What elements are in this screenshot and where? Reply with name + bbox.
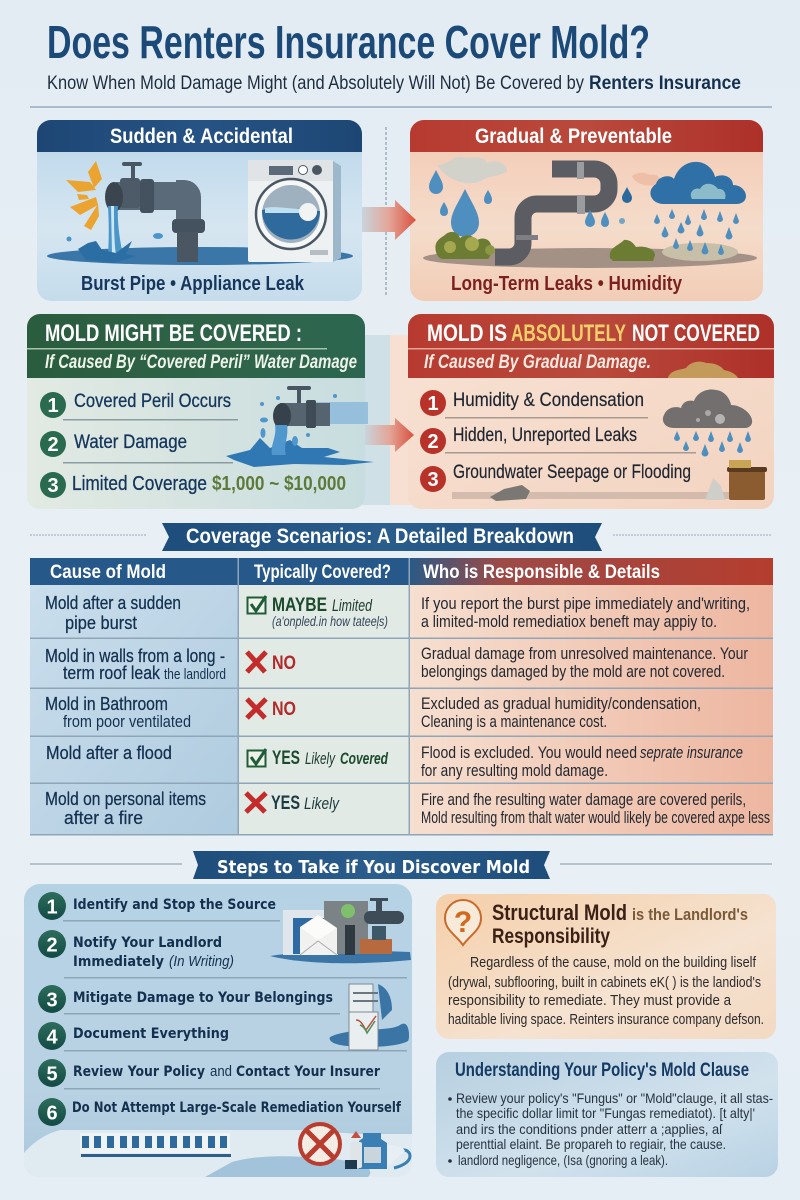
step 6: do not attempt remediation: 6 (46, 1102, 58, 1124)
clause bullet list: landlord negligence, (Isa (gnoring a leak). (458, 1152, 668, 1168)
callout heading: Structural Mold (492, 900, 627, 925)
step 2: notify your landlord: Notify Your Landlord (73, 935, 222, 951)
illustration: mail, meter and valve (270, 898, 411, 963)
step 1: covered peril occurs: Covered Peril Occurs (74, 391, 231, 412)
row: sudden pipe burst: pipe burst (65, 613, 137, 633)
heading: mold is absolutely not covered: MOLD IS (427, 320, 507, 347)
table header row (30, 558, 773, 585)
step 1: covered peril occurs (40, 391, 231, 418)
illustration: rain cloud (650, 162, 746, 255)
heading: steps to take: Steps to Take if You Discover Mold (217, 857, 530, 878)
row: flood: for any resulting mold damage. (421, 761, 608, 780)
heading: mold might be covered (27, 314, 365, 378)
heading: gradual and preventable: Gradual & Preventable (475, 125, 672, 148)
panel: gradual and preventable (410, 120, 763, 301)
illustration: storm cloud (663, 390, 752, 456)
step 3: limited coverage: $1,000 ~ $10,000 (212, 473, 346, 495)
heading: gradual and preventable (410, 120, 763, 152)
subtitle: Renters Insurance (589, 73, 741, 94)
step 1: covered peril occurs: 1 (47, 395, 59, 417)
clause bullet list: and irs the conditions pnder atterr a ;applies, aſ (456, 1121, 723, 1137)
step 2: water damage: 2 (47, 434, 59, 456)
step 3: mitigate damage (38, 985, 333, 1013)
row: sudden pipe burst: (a'onpled.in how tateeļs) (272, 613, 388, 629)
heading: coverage scenarios: Coverage Scenarios: A Detailed Breakdown (186, 525, 574, 548)
row: sudden pipe burst: Limited (332, 596, 372, 615)
table header row: Typically Covered? (254, 562, 391, 583)
step 3: limited coverage: 3 (47, 475, 59, 497)
icon: question mark pin: ? (454, 906, 472, 939)
callout body text: responsibility to remediate. They must provide a (448, 992, 732, 1009)
step 3: groundwater seepage or flooding: 3 (427, 469, 439, 491)
heading: mold is absolutely not covered: If Caused By Gradual Damage. (424, 352, 651, 373)
label: long-term leaks and humidity: Long-Term Leaks • Humidity (451, 273, 683, 295)
row: flood: Flood is excluded. You would need (421, 743, 637, 762)
row: personal items after a fire: YES (271, 793, 300, 814)
illustration: washing machine (248, 160, 341, 262)
label: burst pipe and appliance leak: Burst Pipe • Appliance Leak (81, 273, 305, 295)
callout heading: Responsibility (492, 925, 610, 948)
step 2: notify your landlord: Immediately (73, 954, 164, 970)
arrow: sudden to gradual (362, 200, 416, 240)
illustration: dripping faucet (226, 386, 374, 467)
panel: understanding your policy's mold clause (436, 1052, 778, 1177)
row: sudden pipe burst: Mold after a sudden (45, 593, 181, 613)
clause bullet list: the specific dollar limit tor "Fungas remediatot). [t alty|' (456, 1105, 755, 1121)
step 6: do not attempt remediation: Do Not Attempt Large-Scale Remediation Yourself (72, 1100, 402, 1116)
step 2: notify your landlord (38, 930, 234, 970)
illustration: rusty bucket and debris (452, 460, 767, 501)
step 5: review your policy: Contact Your Insurer (236, 1064, 381, 1080)
row: long-term roof leak: Mold in walls from a long - (45, 646, 225, 666)
step 3: limited coverage (40, 472, 346, 498)
row: flood (46, 743, 743, 780)
step 1: humidity and condensation: 1 (427, 393, 439, 415)
panel: mold might be covered (27, 314, 374, 509)
step 6: do not attempt remediation (38, 1098, 402, 1126)
illustration: blue vent strip (80, 1133, 231, 1157)
illustration: burst pipe (47, 161, 353, 265)
step 2: water damage (40, 431, 187, 457)
step 1: humidity and condensation: Humidity & Condensation (453, 390, 644, 411)
row: flood: Mold after a flood (46, 743, 172, 763)
step 4: document everything: 4 (46, 1026, 58, 1048)
step 5: review your policy (38, 1059, 381, 1087)
step 4: document everything: Document Everything (73, 1026, 229, 1042)
heading: sudden and accidental: Sudden & Accidental (110, 125, 293, 148)
illustration: leaking pipe and mold (423, 157, 757, 268)
heading: steps to take (193, 851, 550, 879)
callout body text: Regardless of the cause, mold on the building liself (470, 954, 757, 971)
row: sudden pipe burst (45, 593, 750, 633)
table: coverage scenarios (30, 558, 773, 836)
step 3: mitigate damage: Mitigate Damage to Your Belongings (73, 990, 333, 1006)
step 3: limited coverage: Limited Coverage (72, 473, 207, 495)
row: bathroom (45, 694, 701, 731)
table header row: Who is Responsible & Details (423, 562, 660, 583)
step 2: hidden unreported leaks: 2 (427, 431, 439, 453)
row: personal items after a fire (45, 789, 770, 828)
row: flood: Likely (305, 749, 336, 768)
row: long-term roof leak: NO (272, 653, 296, 674)
step 5: review your policy: Review Your Policy (73, 1064, 205, 1080)
step 1: identify and stop the source: Identify and Stop the Source (73, 897, 276, 913)
step 2: notify your landlord: 2 (46, 934, 58, 956)
heading: mold might be covered: MOLD MIGHT BE COVERED : (45, 320, 302, 347)
step 5: review your policy: and (210, 1064, 232, 1080)
icon: question mark pin (445, 900, 481, 945)
row: sudden pipe burst: If you report the burst pipe immediately and'writing, (421, 594, 750, 613)
step 2: notify your landlord: (In Writing) (169, 954, 234, 970)
callout heading: is the Landlord's (632, 905, 748, 924)
heading: sudden and accidental (37, 120, 362, 152)
step 3: groundwater seepage or flooding (420, 462, 691, 492)
panel: structural mold callout (436, 894, 776, 1039)
step 1: identify and stop the source: 1 (46, 896, 58, 918)
row: bathroom: Mold in Bathroom (45, 694, 168, 714)
row: bathroom: from poor ventilated (63, 712, 191, 731)
row: personal items after a fire: Likely (304, 794, 340, 813)
step 3: mitigate damage: 3 (46, 990, 58, 1012)
step 1: identify and stop the source (38, 892, 276, 920)
row: sudden pipe burst: MAYBE (272, 595, 327, 616)
row: long-term roof leak: term roof leak (63, 663, 161, 683)
backdrop behind second arrow (360, 335, 414, 505)
heading: mold is absolutely not covered (408, 314, 774, 378)
row: flood: Covered (340, 749, 388, 768)
row: personal items after a fire: after a fire (64, 808, 143, 828)
step 1: humidity and condensation (420, 390, 644, 416)
panel: sudden and accidental (37, 120, 362, 301)
panel: mold is absolutely not covered (408, 314, 774, 509)
arrow: might be covered to not covered (365, 418, 414, 452)
step 3: groundwater seepage or flooding: Groundwater Seepage or Flooding (453, 462, 691, 483)
row: personal items after a fire: Mold on personal items (45, 789, 206, 809)
callout heading (492, 900, 748, 948)
step 2: hidden unreported leaks (420, 425, 637, 454)
clause bullet list: perenttial elaint. Be propareh to regiair, the cause. (456, 1136, 726, 1152)
table header row: Cause of Mold (50, 562, 166, 583)
heading: mold might be covered: If Caused By “Covered Peril” Water Damage (45, 352, 357, 373)
step 2: water damage: Water Damage (74, 432, 187, 453)
clause bullet list (448, 1090, 773, 1168)
row: long-term roof leak: the landlord (164, 666, 226, 683)
row: long-term roof leak (45, 644, 748, 683)
heading: mold is absolutely not covered: ABSOLUTELY (511, 320, 626, 347)
row: flood: seprate insurance (640, 743, 743, 762)
row: long-term roof leak: belongings damaged by the mold are not covered. (421, 662, 725, 681)
row: sudden pipe burst: a limited-mold remediatiox beneft may appiy to. (421, 612, 717, 631)
step 5: review your policy: 5 (46, 1064, 58, 1086)
subtitle: Know When Mold Damage Might (and Absolutely Will Not) Be Covered by (47, 73, 584, 94)
illustration: document checklist (330, 984, 409, 1050)
row: bathroom: Cleaning is a maintenance cost. (421, 712, 607, 731)
row: bathroom: Excluded as gradual humidity/condensation, (421, 694, 701, 713)
step 2: hidden unreported leaks: Hidden, Unreported Leaks (453, 425, 637, 446)
callout body text (448, 954, 764, 1028)
row: bathroom: NO (272, 699, 296, 720)
icon: no do-it-yourself sign and cleaner bottles (300, 1124, 410, 1169)
panel: steps to take (24, 884, 412, 1177)
step 4: document everything (38, 1022, 229, 1050)
row: flood: YES (272, 748, 300, 769)
